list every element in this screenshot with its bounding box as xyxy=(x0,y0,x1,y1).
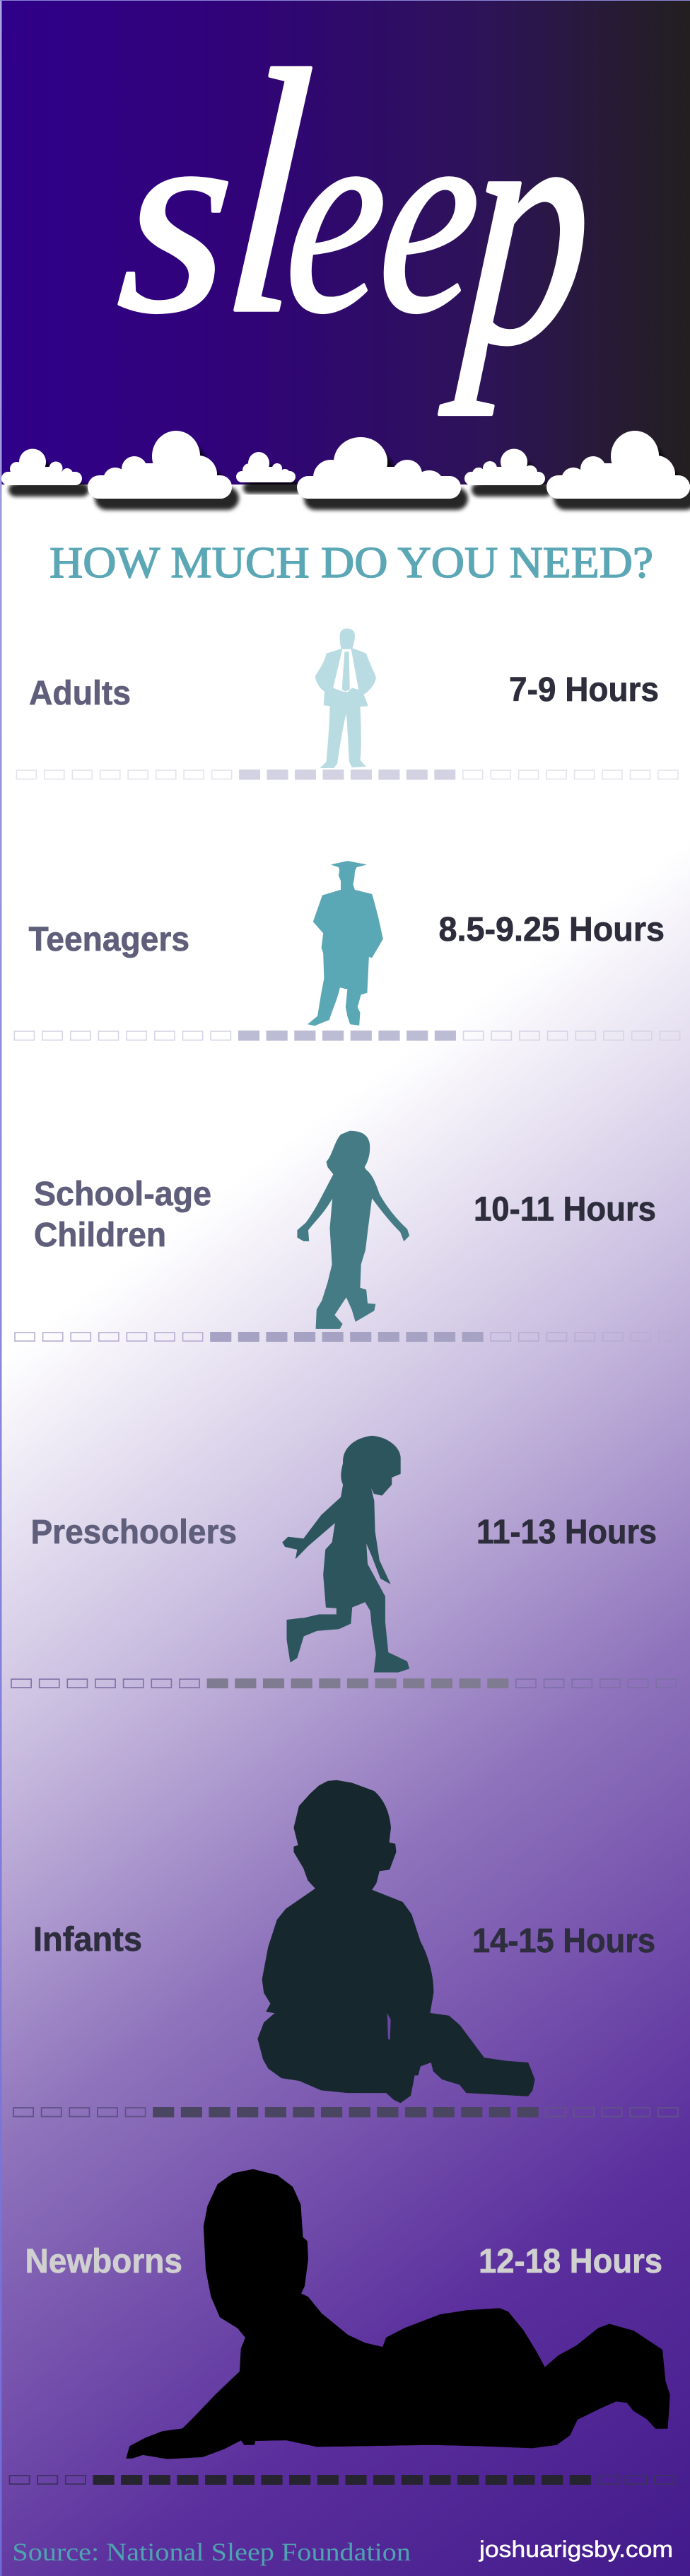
hours: 10-11: 10-11 Hours xyxy=(474,1191,656,1228)
label: school-age children: School-age xyxy=(34,1176,211,1213)
heading: how much do you need: HOW MUCH DO YOU NEED? xyxy=(49,539,653,587)
hours: 11-13: 11-13 Hours xyxy=(476,1514,657,1551)
source credit: Source: National Sleep Foundation xyxy=(12,2538,411,2566)
hours: 7-9: 7-9 Hours xyxy=(509,671,659,709)
cloud 5 xyxy=(464,448,545,485)
silhouette: walking child xyxy=(298,1131,409,1329)
hour bar: preschoolers xyxy=(11,1678,676,1688)
hour bar: adults xyxy=(16,770,678,779)
hour bar: infants xyxy=(13,2107,678,2118)
silhouette: adult man in suit xyxy=(315,629,376,768)
silhouette: sitting infant xyxy=(258,1780,534,2103)
label: newborns: Newborns xyxy=(25,2243,182,2280)
title: sleep: e xyxy=(369,60,493,371)
row: school-age children xyxy=(15,1131,679,1342)
hours: 8.5-9.25: 8.5-9.25 Hours xyxy=(438,911,665,948)
label: school-age children xyxy=(34,1176,211,1254)
hour bar: newborns xyxy=(9,2475,674,2485)
header night sky panel xyxy=(0,0,690,485)
hours: 14-15: 14-15 Hours xyxy=(472,1922,655,1960)
hour bar: school-age children xyxy=(15,1332,679,1342)
cloud 1 xyxy=(1,448,82,485)
cloud 3 xyxy=(236,452,296,482)
silhouette: newborn lying down xyxy=(127,2169,669,2459)
row: preschoolers xyxy=(11,1436,676,1688)
clouds row xyxy=(1,431,690,499)
silhouette: running preschooler xyxy=(283,1436,409,1672)
website credit: joshuarigsby.com xyxy=(479,2536,673,2562)
cloud 4 xyxy=(297,437,461,499)
label: preschoolers: Preschoolers xyxy=(31,1514,237,1551)
label: teenagers: Teenagers xyxy=(28,921,189,958)
silhouette: graduate teenager xyxy=(308,861,382,1026)
title: sleep: p xyxy=(438,36,607,416)
hour bar: teenagers xyxy=(14,1031,680,1041)
cloud 2 xyxy=(88,431,232,499)
title: sleep xyxy=(110,0,607,416)
cloud 6 xyxy=(546,431,690,499)
row: infants xyxy=(13,1780,678,2118)
label: adults: Adults xyxy=(29,675,131,712)
row: newborns xyxy=(9,2169,674,2485)
title: sleep: s xyxy=(110,60,246,371)
row: teenagers xyxy=(14,861,680,1041)
title: sleep: l xyxy=(214,0,323,385)
label: infants: Infants xyxy=(33,1921,142,1959)
title: sleep: e xyxy=(276,60,399,371)
hours: 12-18: 12-18 Hours xyxy=(479,2243,662,2280)
row: adults xyxy=(16,629,678,779)
label: school-age children: Children xyxy=(34,1217,166,1254)
